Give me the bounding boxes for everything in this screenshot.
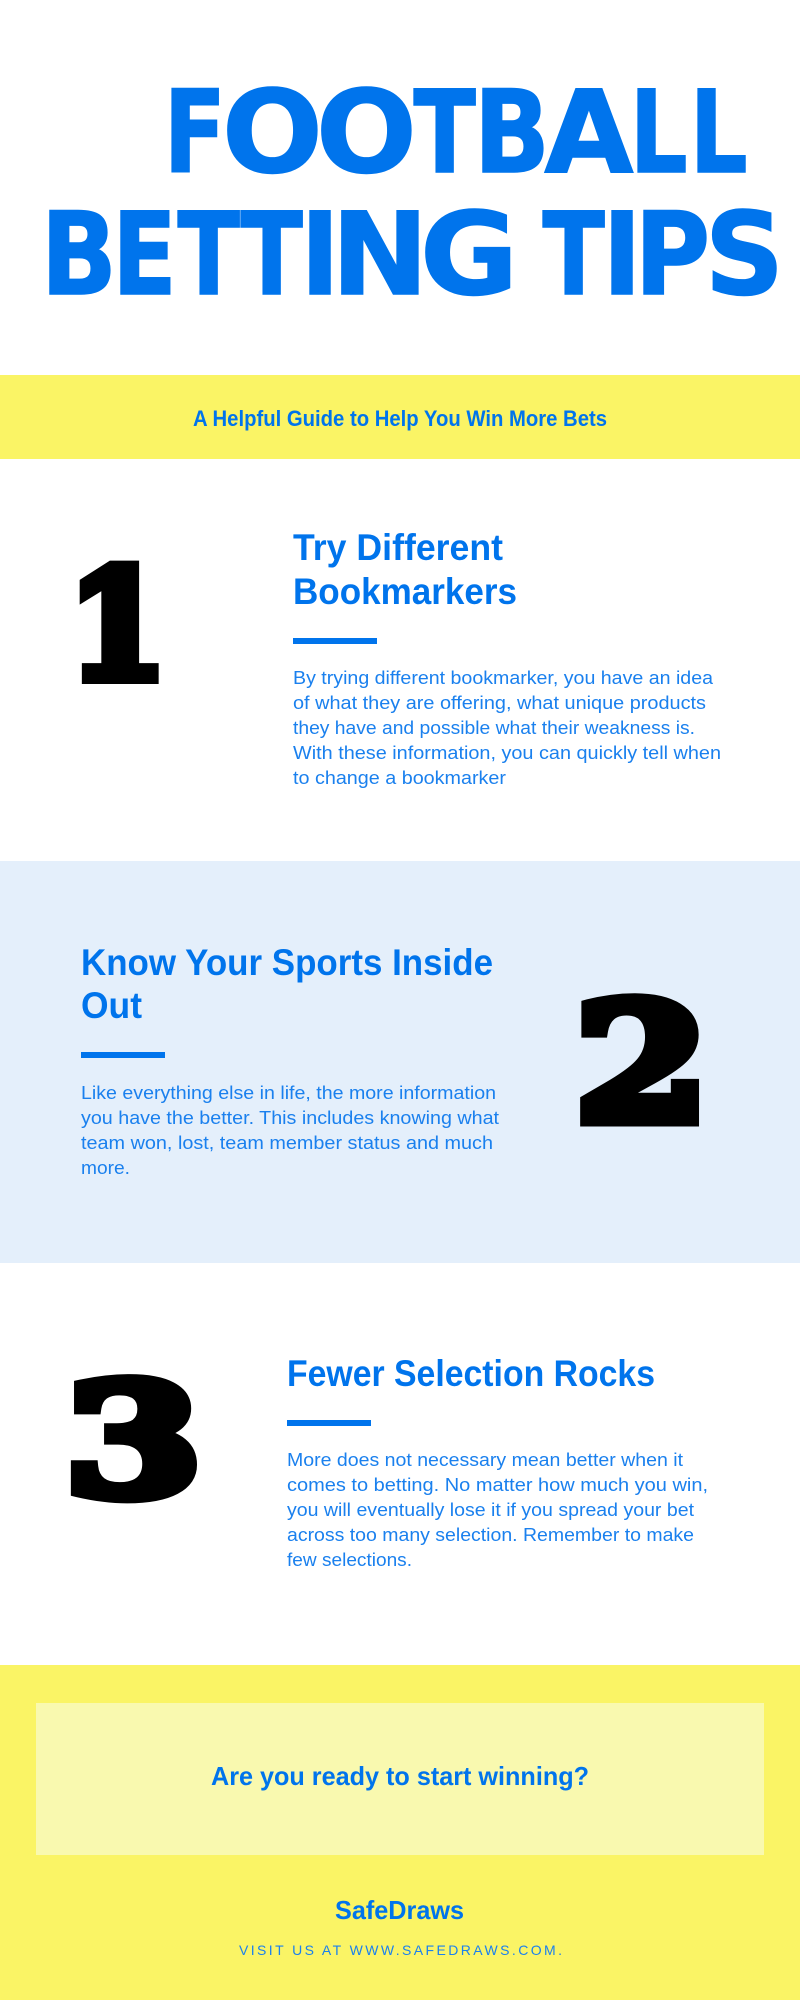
divider: tip 2 (81, 1052, 165, 1058)
title: T (414, 66, 476, 199)
title (41, 66, 784, 321)
number 2: 2 (575, 968, 709, 1158)
title: T (240, 188, 303, 321)
title: E (112, 188, 177, 321)
heading: tip 2: Know Your Sports Inside (81, 942, 493, 983)
panel: tip 2 (0, 861, 800, 1263)
title: F (164, 66, 226, 199)
heading: tip 1 (293, 527, 517, 612)
title: I (602, 188, 642, 321)
number 1: 1 (68, 538, 167, 714)
body text: tip 1: to change a bookmarker (293, 768, 506, 788)
body text: tip 3: across too many selection. Remember to make (287, 1525, 694, 1545)
body text: tip 1: With these information, you can quickly tell when (293, 743, 721, 763)
divider: tip 3 (287, 1420, 371, 1426)
body text: tip 2: more. (81, 1158, 130, 1178)
title: B (41, 188, 117, 321)
title: G (420, 188, 518, 321)
body text: tip 1: By trying different bookmarker, you have an idea (293, 668, 714, 688)
subtitle banner: A Helpful Guide to Help You Win More Bets (193, 406, 607, 431)
call to action box: Are you ready to start winning? (211, 1761, 589, 1791)
body text: tip 3: few selections. (287, 1550, 412, 1570)
title: S (705, 188, 784, 321)
title: P (634, 188, 710, 321)
subtitle banner (0, 375, 800, 459)
heading: tip 2 (81, 942, 493, 1026)
heading: tip 2: Out (81, 985, 142, 1026)
brand name: SafeDraws (335, 1895, 464, 1925)
title: B (474, 66, 550, 199)
panel: footer (0, 1665, 800, 2000)
title: I (300, 188, 340, 321)
title: A (544, 66, 633, 199)
website line: VISIT US AT WWW.SAFEDRAWS.COM. (239, 1942, 562, 1958)
title: L (690, 66, 748, 199)
heading: tip 1: Bookmarkers (293, 571, 517, 612)
body text: tip 3 (287, 1450, 708, 1570)
number 3: 3 (65, 1350, 202, 1532)
title: T (178, 188, 240, 321)
title: N (331, 188, 429, 321)
title: O (222, 66, 323, 199)
heading: tip 3: Fewer Selection Rocks (287, 1353, 655, 1394)
body text: tip 1: they have and possible what their weakness is. (293, 718, 695, 738)
body text: tip 3: comes to betting. No matter how much you win, (287, 1475, 708, 1495)
body text: tip 2 (81, 1083, 499, 1178)
body text: tip 2: you have the better. This includes knowing what (81, 1108, 499, 1128)
body text: tip 1: of what they are offering, what unique products (293, 693, 706, 713)
body text: tip 2: Like everything else in life, the more information (81, 1083, 496, 1103)
divider: tip 1 (293, 638, 377, 644)
panel: tip 1 (68, 527, 721, 788)
title: O (316, 66, 417, 199)
title: T (542, 188, 605, 321)
title: L (630, 66, 688, 199)
body text: tip 3: you will eventually lose it if you spread your bet (287, 1500, 694, 1520)
body text: tip 3: More does not necessary mean better when it (287, 1450, 683, 1470)
body text: tip 1 (293, 668, 721, 788)
call to action box (36, 1703, 764, 1855)
heading: tip 1: Try Different (293, 527, 503, 568)
panel: tip 3 (65, 1350, 708, 1570)
body text: tip 2: team won, lost, team member status and much (81, 1133, 493, 1153)
